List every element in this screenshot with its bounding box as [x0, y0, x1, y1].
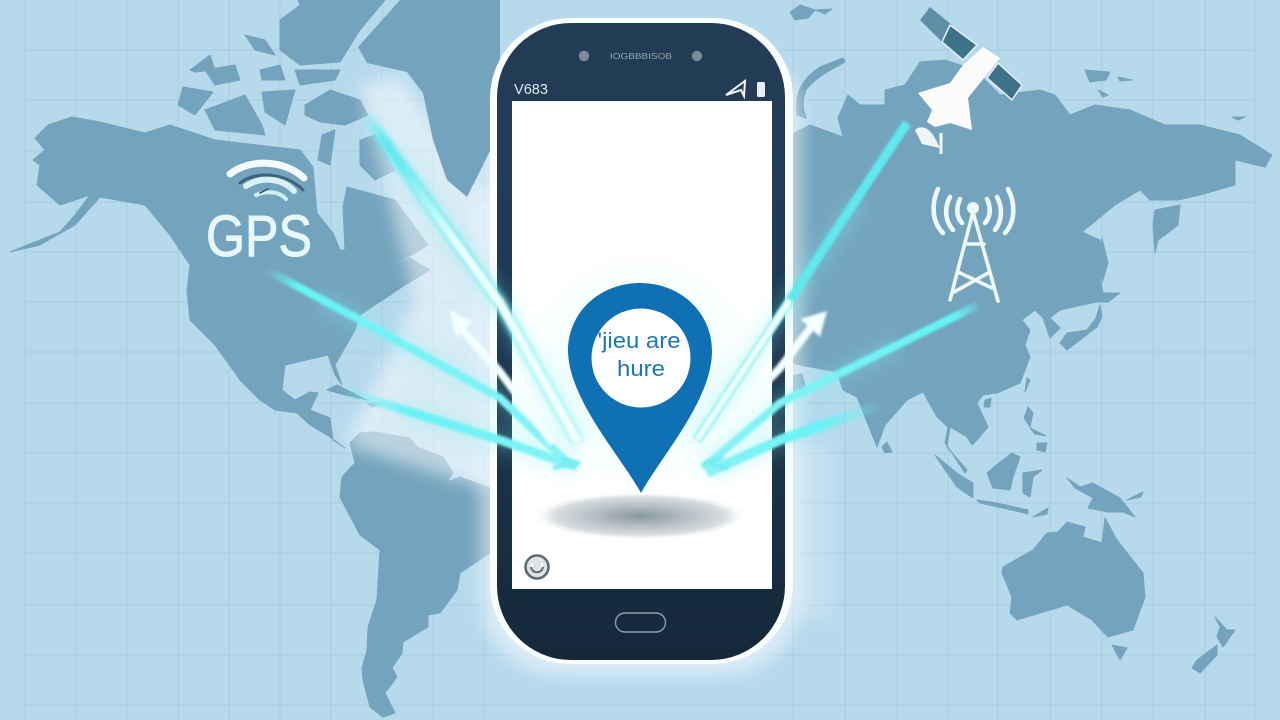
white arrow left: [450, 310, 553, 443]
pin text: hure: [617, 356, 665, 381]
pin shape: [568, 283, 712, 493]
beam glow layer: [320, 165, 900, 473]
beam arrowheads left: [553, 458, 578, 468]
map: Arctic Russian islands: [790, 5, 1245, 120]
map: New Zealand: [1192, 617, 1235, 673]
beam from India: [707, 405, 880, 473]
map: Greenland: [358, 0, 500, 197]
map: Novaya Zemlya: [797, 58, 845, 118]
map: South America: [340, 432, 490, 717]
pin text: [598, 328, 680, 381]
icon: wifi arcs: [230, 163, 304, 199]
smiley icon: [526, 556, 548, 578]
screen glow: [515, 245, 765, 495]
map: Kamchatka shaped peninsula: [1153, 205, 1180, 253]
glow behind phone: [345, 40, 833, 675]
satellite body: [918, 47, 1000, 130]
location shadow: [532, 492, 748, 540]
map: Canadian Arctic islands: [178, 0, 395, 180]
map: North America: [10, 117, 430, 448]
pin inner circle: [592, 308, 690, 408]
beam arrowheads right: [705, 458, 728, 468]
beam from tower: [703, 305, 978, 468]
pin text: 'jieu are: [598, 328, 680, 353]
phone white rim: [490, 18, 793, 664]
satellite dish: [915, 127, 941, 154]
GPS label: GPS: [206, 204, 312, 269]
satellite solar panels: [920, 7, 1022, 100]
phone speaker dots: [579, 51, 702, 61]
map: Tasmania: [1112, 645, 1127, 660]
beam from satellite: [697, 123, 907, 440]
map: Caribbean islands: [327, 385, 383, 407]
status text: V683: [514, 81, 548, 98]
location pin: [568, 283, 712, 493]
white arrow right: [707, 311, 827, 443]
beam from Caribbean: [340, 390, 577, 467]
beam from GPS: [267, 270, 567, 462]
map: Australia: [1002, 518, 1145, 637]
map: Southeast Asian islands: [882, 378, 1143, 517]
icon: satellite: [915, 7, 1022, 154]
phone top label: IOGBBBISOB: [610, 51, 672, 61]
icon: GPS signal and label: [206, 163, 312, 269]
icon: cell tower: [934, 189, 1013, 301]
map: Sakhalin: [1100, 238, 1108, 283]
phone: [490, 18, 793, 664]
signal beams: [267, 117, 978, 473]
phone screen: [512, 101, 772, 589]
map: Japan: [1060, 293, 1120, 350]
beam from Canada: [367, 117, 578, 442]
map: Arabian fragment: [790, 374, 806, 392]
home button: [616, 613, 666, 632]
map: Eurasia: [790, 60, 1272, 473]
status icons: [726, 81, 765, 97]
phone body: [497, 23, 785, 660]
